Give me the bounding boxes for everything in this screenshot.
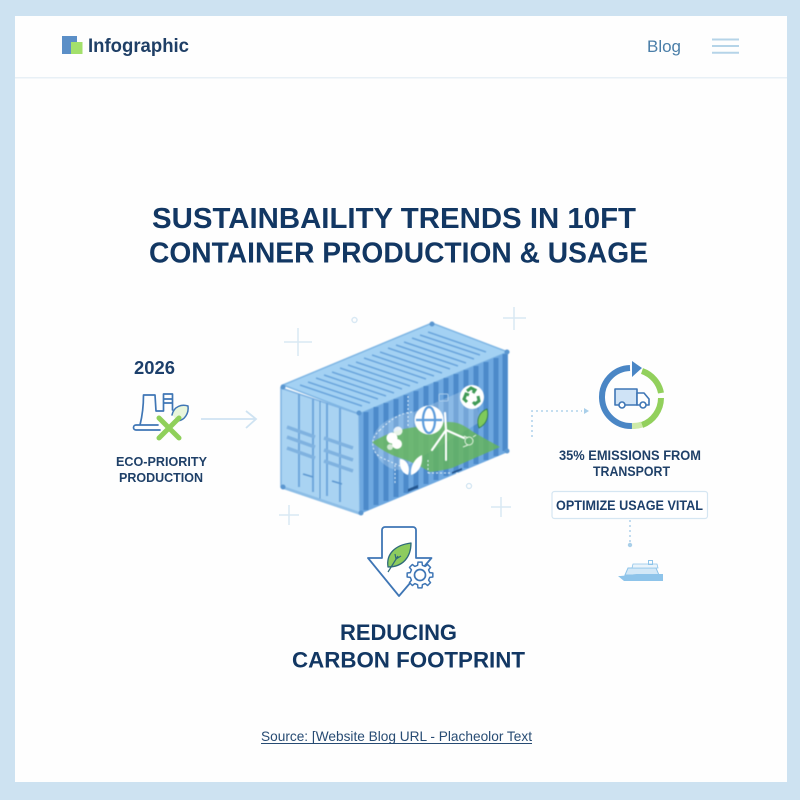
label: eco-priority production: ECO-PRIORITY: [116, 455, 208, 469]
container side face: [359, 352, 508, 514]
source line: Source: [Website Blog URL - Placheolor Text: [261, 728, 532, 744]
icon: arrow with leaf and gear: [368, 527, 433, 596]
heading: reducing carbon footprint: [292, 620, 525, 672]
corner castings: [280, 322, 510, 516]
icon: logo: [62, 36, 82, 54]
icon: white leaves: [400, 455, 422, 475]
dotted connector: callout to ship: [628, 520, 632, 547]
icon: wind turbine: [432, 413, 464, 460]
label: eco-priority production: [116, 455, 208, 485]
container door face: [281, 388, 360, 515]
icon: truck in cycle: [602, 361, 661, 426]
arrowhead: [584, 408, 589, 414]
label: emissions: [559, 448, 701, 479]
arrow: production to container: [201, 411, 256, 428]
icon: eco cluster: [386, 426, 402, 450]
icon: factory with leaf and cross: [134, 394, 188, 438]
side translucent glow: [372, 386, 480, 470]
icon: green leaf: [478, 409, 488, 428]
icon: hamburger menu: [712, 40, 739, 53]
green landscape: [372, 422, 500, 472]
icon: globe: [414, 406, 444, 434]
left column: 2026: [116, 358, 208, 485]
icon: recycling badge: [460, 385, 484, 409]
illustration: shipping container: [280, 322, 510, 516]
logo wordmark: Infographic: [88, 35, 189, 57]
title: [149, 203, 648, 270]
year label: 2026: [134, 358, 175, 378]
dotted connector: container to transport: [532, 411, 582, 437]
callout: optimize usage vital: OPTIMIZE USAGE VITAL: [556, 497, 703, 513]
label: eco-priority production: PRODUCTION: [119, 471, 203, 485]
decorative sparkles: [279, 307, 526, 525]
title: CONTAINER PRODUCTION & USAGE: [149, 238, 648, 270]
nav link: Blog: Blog: [647, 38, 681, 56]
callout: optimize usage vital: [552, 492, 708, 518]
icon: ship: [618, 560, 663, 581]
icon: small screen: [439, 394, 448, 401]
label: emissions: TRANSPORT: [593, 464, 671, 479]
container roof: [283, 323, 508, 414]
title: SUSTAINBAILITY TRENDS IN 10FT: [152, 203, 637, 235]
heading: reducing carbon footprint: REDUCING: [340, 620, 457, 645]
icon: small gear sketch: [463, 435, 476, 447]
heading: reducing carbon footprint: CARBON FOOTPRINT: [292, 648, 525, 672]
label: emissions: 35% EMISSIONS FROM: [559, 448, 701, 463]
